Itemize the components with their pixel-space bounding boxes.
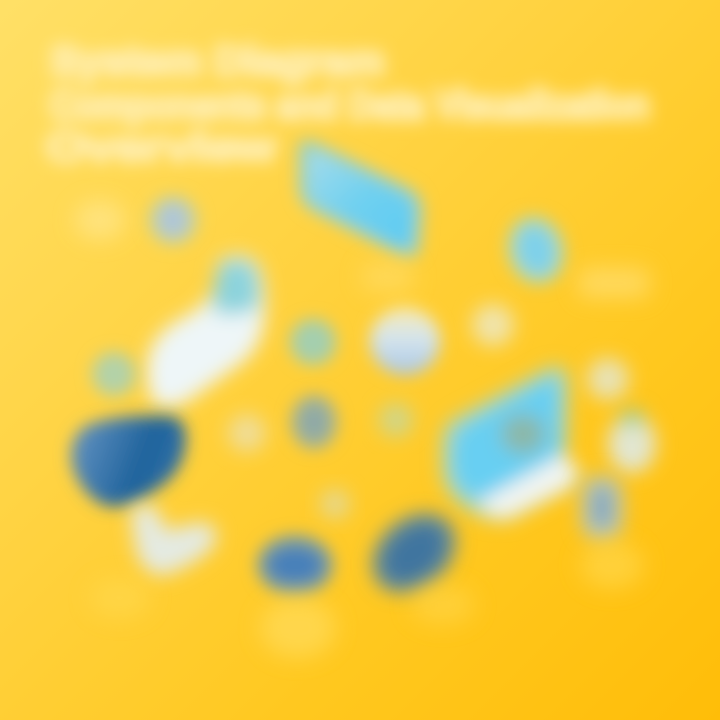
panel: left white device [146,255,265,408]
label: upper centre pale text [362,262,414,292]
icon: centre sphere [370,307,440,375]
icon: right pale circle top [587,358,629,400]
label: bottom left pale text [90,578,150,618]
heading: Overview [46,123,276,170]
icon: bottom tilted navy [357,497,471,609]
icon: right bell shape [608,409,656,473]
icon: top right blue oval [499,209,573,291]
icon: small tan circle [320,489,350,519]
panel: keyboard white slab [130,504,216,576]
label: bottom right pale text [580,541,644,589]
icon: right slate capsule [581,475,623,541]
label: bottom centre right pale text [411,585,475,625]
icon: top left blue circle [148,195,198,245]
icon: centre green circle [290,319,336,365]
icon: top left pale circle [74,200,126,240]
icon: navy device [71,416,186,507]
icon: pale circle [472,304,514,346]
icon: slate circle [291,395,337,449]
icon: pale centre left circle [228,414,266,452]
icon: small olive circle [379,403,413,437]
label: right pale text [578,268,650,298]
panel: top tilted screen [298,140,423,258]
icon: bottom oval navy [257,535,333,595]
panel: right laptop [442,366,580,521]
heading [46,37,650,170]
icon: left small green circle [92,352,136,396]
heading: System Diagram [50,37,385,84]
label: bottom centre pale text [260,598,336,658]
